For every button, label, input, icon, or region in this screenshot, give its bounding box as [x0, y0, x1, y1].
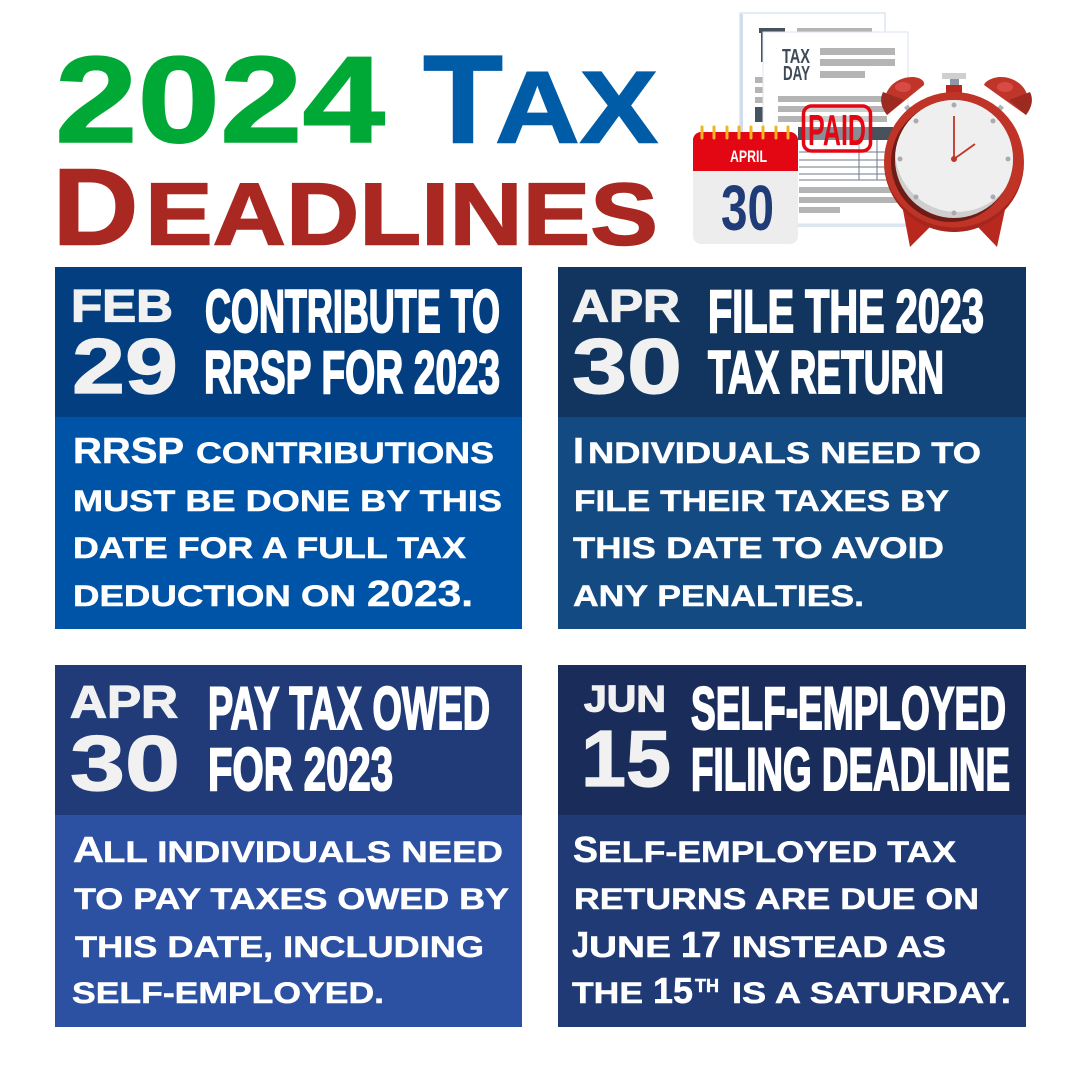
heading	[708, 278, 984, 406]
description: I	[573, 430, 584, 471]
date: Apr 30: APR	[70, 676, 178, 728]
heading	[208, 675, 490, 803]
heading	[204, 278, 500, 406]
description: DATE FOR A FULL TAX	[73, 532, 466, 565]
date: Apr 30: 30	[70, 719, 180, 807]
panel body	[558, 417, 1026, 629]
description: NDIVIDUALS NEED TO	[588, 437, 981, 470]
date: Jun 15: JUN	[584, 678, 666, 720]
description: INSTEAD AS	[732, 931, 946, 964]
heading: CONTRIBUTE TO	[205, 278, 500, 345]
panel: Apr 30 pay tax	[55, 665, 522, 1027]
icon: paid stamp	[804, 106, 870, 155]
description	[73, 430, 502, 614]
description: TO PAY TAXES OWED BY	[74, 883, 509, 916]
illustration: tax documents, calendar and alarm clock	[693, 13, 1032, 247]
text: tax day	[782, 46, 810, 85]
description: RRSP	[73, 430, 184, 471]
date: Feb 29: 29	[72, 322, 178, 410]
icon: front tax sheet	[763, 32, 908, 227]
description: A	[73, 829, 104, 870]
description	[72, 829, 509, 1010]
panel: Apr 30 file return	[558, 267, 1026, 629]
description: MUST BE DONE BY THIS	[73, 485, 502, 518]
title: Tax: AX	[495, 50, 658, 164]
heading: PAY TAX OWED	[208, 675, 490, 742]
description: S	[573, 829, 598, 870]
title: Tax: T	[423, 28, 503, 170]
title: Tax	[423, 28, 658, 170]
title: Deadlines	[52, 146, 658, 268]
heading: TAX RETURN	[708, 339, 944, 406]
panel header	[558, 665, 1026, 815]
description: 15	[653, 970, 693, 1011]
date: Jun 15: 15	[581, 714, 671, 803]
panel header	[55, 267, 522, 417]
description: 17	[681, 924, 721, 965]
heading: RRSP FOR 2023	[204, 339, 500, 406]
description: 2023.	[367, 573, 473, 614]
description: ELF-EMPLOYED TAX	[598, 836, 956, 869]
description: THIS DATE TO AVOID	[573, 532, 944, 565]
description	[572, 829, 1011, 1011]
description	[573, 430, 981, 613]
title: Deadlines: EADLINES	[145, 164, 658, 264]
date: Apr 30	[70, 676, 180, 807]
text: tax day: TAX	[782, 46, 810, 68]
panel body	[558, 815, 1026, 1027]
description: THE	[572, 977, 643, 1010]
icon: calendar	[693, 127, 798, 244]
text: tax day: DAY	[783, 63, 810, 85]
description: RETURNS ARE DUE ON	[574, 883, 979, 916]
date: Apr 30	[572, 280, 682, 410]
date: Feb 29	[71, 280, 178, 410]
description: THIS DATE, INCLUDING	[75, 931, 484, 964]
description: J	[572, 924, 589, 965]
description: IS A SATURDAY.	[732, 977, 1011, 1010]
heading	[691, 675, 1010, 803]
date: Apr 30: 30	[572, 322, 682, 410]
description: DEDUCTION ON	[73, 580, 356, 613]
panel header	[55, 665, 522, 815]
description: FILE THEIR TAXES BY	[574, 485, 949, 518]
panel body	[55, 417, 522, 629]
panel body	[55, 815, 522, 1027]
text: 30: 30	[721, 172, 774, 244]
date: Apr 30: APR	[572, 280, 680, 332]
title: Deadlines: D	[52, 146, 138, 268]
date: Feb 29: FEB	[71, 280, 173, 332]
description: SELF-EMPLOYED.	[72, 977, 384, 1010]
icon: paid stamp: PAID	[808, 106, 866, 155]
description: LL INDIVIDUALS NEED	[103, 836, 503, 869]
description: CONTRIBUTIONS	[196, 437, 494, 470]
text: april: APRIL	[730, 147, 767, 166]
description: ANY PENALTIES.	[573, 580, 864, 613]
icon: alarm clock	[881, 73, 1032, 247]
heading: FOR 2023	[208, 736, 393, 803]
description: UNE	[589, 931, 671, 964]
title	[52, 28, 658, 268]
panel: Jun 15 self-employed	[558, 665, 1026, 1027]
title: 2024: 2024	[55, 32, 385, 169]
description: TH	[695, 976, 719, 996]
icon: back tax sheet	[740, 13, 885, 138]
panel header	[558, 267, 1026, 417]
panel: Feb 29 RRSP	[55, 267, 522, 629]
